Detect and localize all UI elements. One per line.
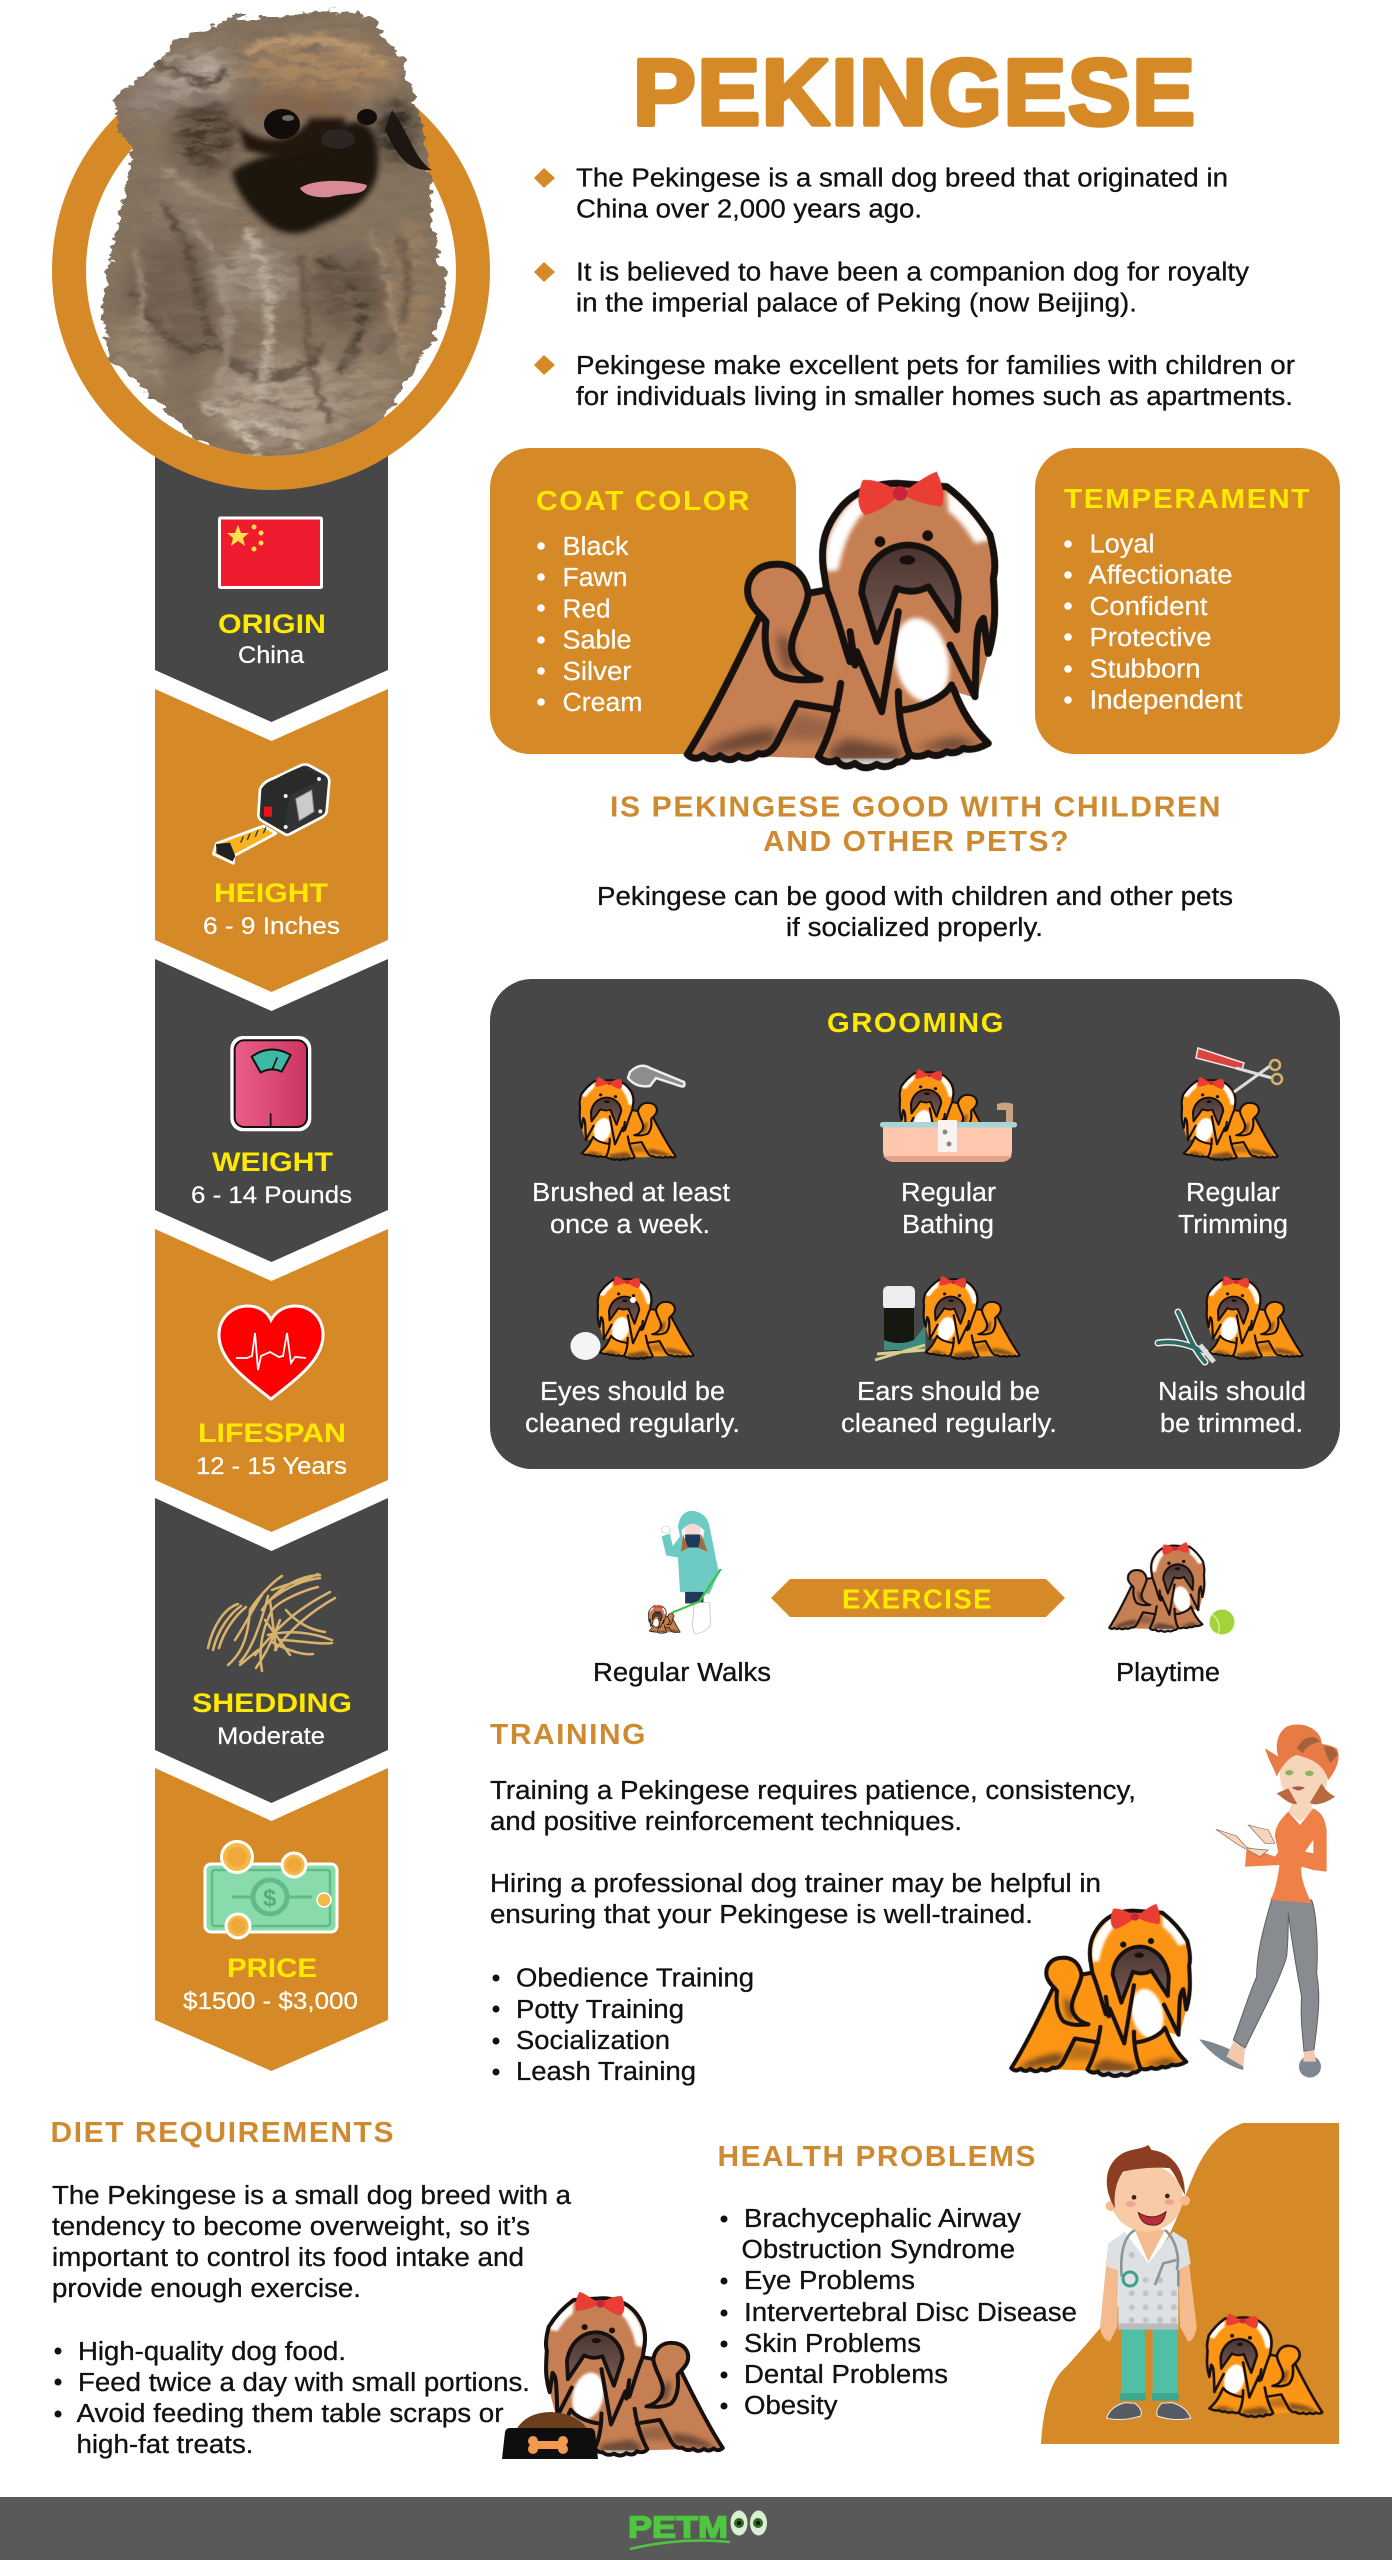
label: origin: ORIGIN [218,609,326,639]
logo: petmoo [628,2510,767,2549]
grooming: brushing [532,1066,730,1239]
chevron: price [155,1768,388,2071]
temperament list: Affectionate [1088,562,1232,590]
icon: bone [528,2436,568,2454]
icon: money: $ [263,1885,277,1912]
ribbon: exercise: EXERCISE [842,1584,993,1614]
chevron: origin [155,440,388,722]
label: shedding: SHEDDING [192,1688,352,1718]
list: health problems: Intervertebral Disc Disease [744,2299,1077,2327]
temperament list: Independent [1090,686,1242,714]
grooming: brushing: once a week. [550,1211,710,1239]
grooming: bathing: Regular [901,1179,997,1207]
list: health problems: Skin Problems [744,2330,921,2358]
grooming: bathing [880,1069,1017,1239]
panel: grooming [490,979,1340,1469]
bullet two: It is believed to have been a companion dog for royalty [576,258,1249,286]
icon: tape measure [213,764,329,863]
coat list: Silver [562,658,632,686]
bullet one: The Pekingese is a small dog breed that originated in [576,164,1228,192]
temperament list [1064,530,1242,714]
grooming: nails [1158,1276,1306,1438]
grooming: ears: Ears should be [857,1378,1040,1406]
grooming: trimming: Trimming [1178,1211,1288,1239]
text: diet: important to control its food intake and [52,2244,524,2272]
coat list: Red [562,596,610,624]
heading: good with children [610,792,1222,858]
illustration: dog with ball [1109,1542,1234,1634]
label: lifespan: LIFESPAN [198,1418,346,1448]
heading: coat color: COAT COLOR [536,485,751,516]
value: price: $1500 - $3,000 [183,1988,358,2015]
grooming: ears [841,1276,1057,1438]
temperament list: Confident [1090,593,1208,621]
list: training types [492,1964,754,2086]
grooming: ears: cleaned regularly. [841,1410,1057,1438]
icon: scale [230,1036,311,1131]
heading: training: TRAINING [490,1719,647,1751]
coat list: Cream [562,689,642,717]
chevron: height [155,689,388,992]
illustration: dog with food bowl [502,2292,723,2459]
temperament list: Stubborn [1090,656,1200,684]
coat list: Fawn [562,564,628,592]
logo: petmoo: PETM [628,2510,728,2544]
list: health problems [720,2205,1077,2420]
title: PEKINGESE [633,40,1195,145]
footer bar [0,2497,1392,2560]
grooming: trimming: Regular [1186,1179,1281,1207]
icon: shed hair [208,1574,335,1671]
text: children answer: Pekingese can be good with children and other pets [597,883,1233,911]
list: diet tips: Feed twice a day with small portions. [78,2369,530,2397]
heading: good with children: IS PEKINGESE GOOD WITH CHILDREN [610,792,1222,824]
illustration: orange dog [1011,1904,1190,2076]
heading: grooming: GROOMING [827,1007,1005,1038]
chevron: shedding [155,1498,388,1803]
bullet three: for individuals living in smaller homes such as apartments. [576,383,1293,411]
illustration: health dog [1207,2313,1322,2417]
text: training: and positive reinforcement techniques. [490,1808,962,1836]
grooming: trimming [1178,1048,1288,1239]
coat list: Black [562,533,629,561]
illustration: brown dog [687,472,996,768]
text: diet [52,2182,572,2303]
list: health problems: Brachycephalic Airway [744,2205,1021,2233]
illustration: woman walking dog [648,1511,721,1633]
list: training types: Obedience Training [516,1964,754,1992]
label: weight: WEIGHT [212,1147,334,1177]
text: training: Hiring a professional dog trainer may be helpful in [490,1870,1101,1898]
heading: health problems: HEALTH PROBLEMS [718,2141,1037,2173]
illustration: doctor [1100,2145,1197,2420]
list: training types: Leash Training [516,2058,696,2086]
value: shedding: Moderate [217,1723,325,1750]
list: diet tips: high-fat treats. [76,2431,254,2459]
value: height: 6 - 9 Inches [203,913,340,940]
panel: orange wave [1041,2123,1339,2444]
bullet three [534,352,1296,411]
text: children answer: if socialized properly. [786,914,1043,942]
chevron: weight [155,959,388,1262]
label: regular walks: Regular Walks [593,1659,771,1687]
bullet two [534,258,1249,318]
bullet three: Pekingese make excellent pets for families with children or [576,352,1296,380]
icon: money [205,1842,337,1938]
text: training: ensuring that your Pekingese is well-trained. [490,1901,1033,1929]
text: diet: tendency to become overweight, so it’s [52,2213,530,2241]
bullet one: China over 2,000 years ago. [576,196,922,224]
list: health problems: Dental Problems [744,2361,948,2389]
coat list: Sable [562,626,632,654]
grooming: eyes: Eyes should be [540,1378,725,1406]
grooming: eyes: cleaned regularly. [525,1410,740,1438]
list: health problems: Obesity [744,2392,838,2420]
grooming: eyes [525,1276,740,1438]
label: height: HEIGHT [214,878,329,908]
text: diet: provide enough exercise. [52,2275,361,2303]
illustration: trainer woman [1199,1725,1339,2078]
coat list [537,533,642,717]
text: diet: The Pekingese is a small dog breed with a [52,2182,572,2210]
bullet two: in the imperial palace of Peking (now Beijing). [576,290,1137,318]
list: diet tips [54,2338,530,2459]
temperament list: Loyal [1090,530,1154,558]
label: price: PRICE [227,1953,317,1983]
list: diet tips: Avoid feeding them table scraps or [76,2400,504,2428]
value: weight: 6 - 14 Pounds [191,1182,352,1209]
icon: china flag [220,518,322,588]
pekingese photo [100,9,447,462]
list: health problems: Obstruction Syndrome [742,2236,1015,2264]
text: children answer [597,883,1233,942]
value: china: China [238,642,305,669]
ribbon: exercise [771,1579,1065,1617]
list: health problems: Eye Problems [744,2267,915,2295]
heading: diet requirements: DIET REQUIREMENTS [50,2117,395,2149]
heading: good with children: AND OTHER PETS? [763,826,1070,858]
grooming: bathing: Bathing [902,1211,994,1239]
grooming: brushing: Brushed at least [532,1179,730,1207]
intro bullets [534,164,1296,411]
bullet one [534,164,1228,224]
value: lifespan: 12 - 15 Years [196,1453,347,1480]
orange ring [69,69,473,473]
list: training types: Socialization [516,2027,670,2055]
heading: temperament: TEMPERAMENT [1064,483,1311,514]
grooming: nails: be trimmed. [1160,1410,1303,1438]
label: playtime: Playtime [1116,1659,1220,1687]
panel: temperament [1035,448,1340,754]
chevron: lifespan [155,1229,388,1532]
text: training: Training a Pekingese requires patience, consistency, [490,1777,1136,1805]
panel: coat color [490,448,796,754]
list: training types: Potty Training [516,1996,684,2024]
text: training [490,1777,1136,1929]
grooming: nails: Nails should [1158,1378,1306,1406]
temperament list: Protective [1090,624,1212,652]
icon: heart [219,1306,323,1399]
list: diet tips: High-quality dog food. [78,2338,346,2366]
